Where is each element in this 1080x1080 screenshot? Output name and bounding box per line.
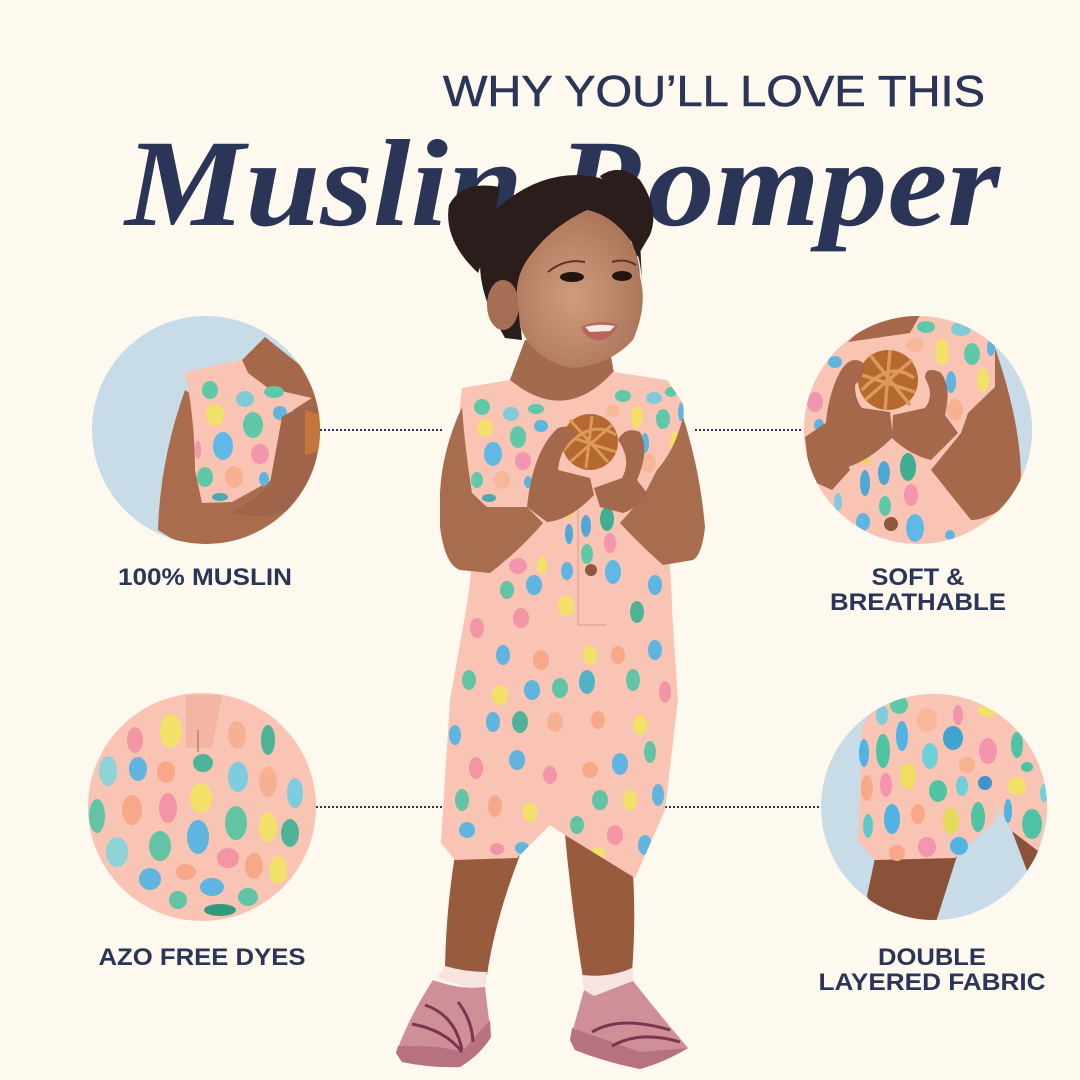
neck xyxy=(508,340,616,405)
dotted connector: bottom left xyxy=(316,806,442,808)
romper xyxy=(441,372,684,878)
circle: breathable chest detail xyxy=(800,315,1040,547)
label: soft and breathable: BREATHABLE xyxy=(830,589,1006,616)
legs xyxy=(445,835,634,978)
circle: double layered fabric xyxy=(820,690,1050,925)
label: 100% muslin: 100% MUSLIN xyxy=(118,564,292,591)
left hand xyxy=(527,427,594,522)
dotted connector: top left xyxy=(320,429,442,431)
pigtail right xyxy=(600,170,653,257)
right hand xyxy=(594,430,647,513)
ball xyxy=(562,414,618,470)
socks xyxy=(437,966,634,996)
eyes, brows and mouth xyxy=(548,261,636,340)
label: double layered fabric xyxy=(818,944,1046,996)
shoe soles xyxy=(396,1020,688,1069)
title: Muslin Romper: Muslin Romper xyxy=(123,115,1002,252)
pigtail left xyxy=(448,185,500,273)
shoes xyxy=(396,980,688,1069)
ear xyxy=(487,280,519,330)
dotted connector: bottom right xyxy=(665,806,820,808)
label: soft and breathable xyxy=(830,564,1006,616)
ball strands xyxy=(564,416,616,468)
circle: shoulder detail xyxy=(90,315,325,550)
label: soft and breathable: SOFT & xyxy=(872,564,964,591)
hair xyxy=(480,175,642,340)
face xyxy=(517,210,643,368)
left arm xyxy=(440,407,543,573)
right arm xyxy=(620,417,705,565)
circle: azo free dyes fabric xyxy=(85,690,320,925)
label: double layered fabric: DOUBLE xyxy=(878,944,986,971)
placket and button xyxy=(578,510,606,625)
label: double layered fabric: LAYERED FABRIC xyxy=(818,969,1046,996)
dotted connector: top right xyxy=(695,429,803,431)
romper dots xyxy=(449,387,684,859)
heading: why you'll love this: WHY YOU’LL LOVE THIS xyxy=(443,67,985,116)
child figure xyxy=(396,170,705,1069)
label: azo free dyes: AZO FREE DYES xyxy=(98,944,306,971)
shoe stripes xyxy=(412,1002,680,1052)
